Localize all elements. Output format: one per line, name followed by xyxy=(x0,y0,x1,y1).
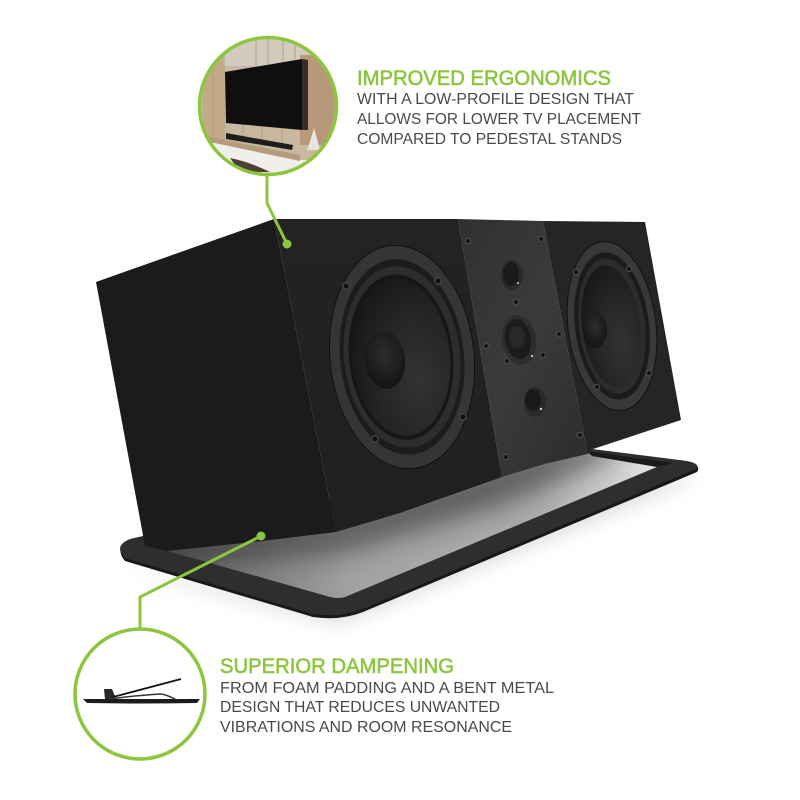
body text: improved ergonomics xyxy=(357,91,642,148)
heading: improved ergonomics: IMPROVED ERGONOMICS xyxy=(357,67,611,90)
callout: TV room photo circle xyxy=(198,36,340,180)
body text: improved ergonomics: ALLOWS FOR LOWER TV PLACEMENT xyxy=(357,111,642,128)
callout: stand side profile circle xyxy=(75,629,205,759)
right woofer xyxy=(558,236,666,416)
cabinet side face xyxy=(96,219,336,551)
body text: superior dampening: VIBRATIONS AND ROOM RESONANCE xyxy=(220,719,512,736)
cabinet right front face xyxy=(543,221,681,451)
panel screws xyxy=(465,236,583,460)
body text: superior dampening: FROM FOAM PADDING AND A BENT METAL xyxy=(220,680,554,697)
stand base plate xyxy=(120,435,698,618)
body text: superior dampening xyxy=(220,680,554,736)
cabinet left front face xyxy=(274,219,502,532)
left woofer xyxy=(319,238,485,476)
body text: improved ergonomics: COMPARED TO PEDESTAL STANDS xyxy=(357,131,622,148)
floor shadow xyxy=(125,478,700,625)
body text: superior dampening: DESIGN THAT REDUCES UNWANTED xyxy=(220,699,500,716)
connector line: bottom callout xyxy=(140,532,266,628)
speaker cabinet xyxy=(96,219,681,551)
connector line: top callout xyxy=(267,175,292,248)
heading: superior dampening: SUPERIOR DAMPENING xyxy=(220,655,454,678)
body text: improved ergonomics: WITH A LOW-PROFILE DESIGN THAT xyxy=(357,91,635,108)
cabinet centre panel xyxy=(458,219,587,477)
foam pad xyxy=(168,454,657,598)
tweeter and mid drivers xyxy=(499,260,546,417)
